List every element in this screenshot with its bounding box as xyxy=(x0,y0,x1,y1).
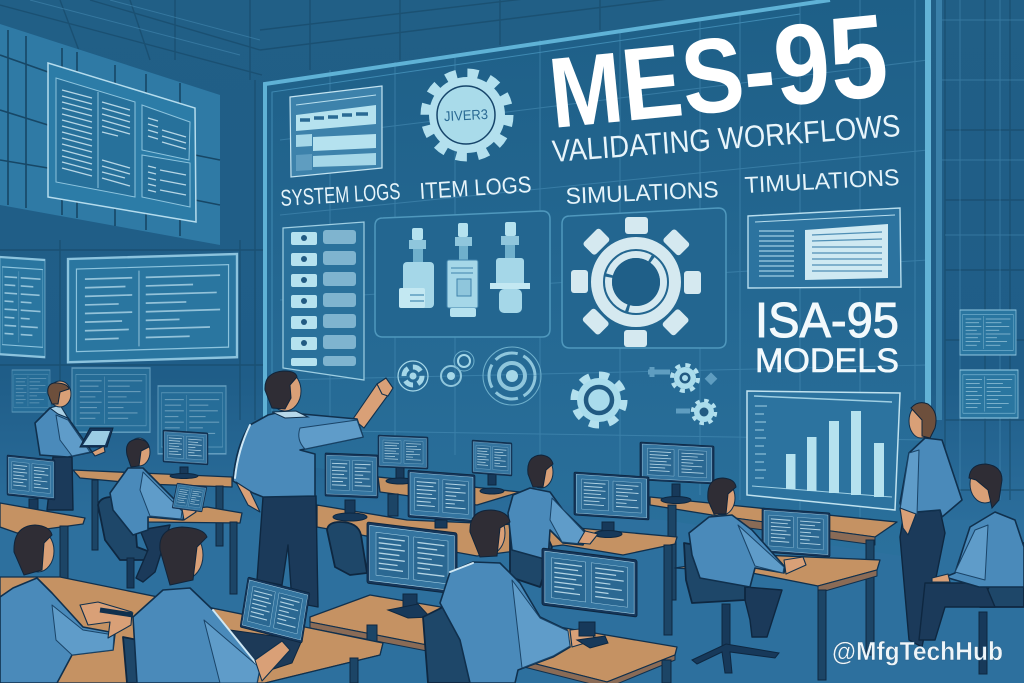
person: seated mid center xyxy=(508,455,598,587)
monitor: right back xyxy=(640,442,714,504)
label: item logs: ITEM LOGS xyxy=(419,171,532,204)
chair: center empty xyxy=(327,522,367,575)
person: standing with tablet xyxy=(35,381,113,510)
monitor: right middle xyxy=(574,472,649,538)
person: seated front left xyxy=(0,525,133,683)
icons: target wheels xyxy=(398,347,541,405)
desk: right middle row xyxy=(675,555,880,680)
bar chart panel xyxy=(747,391,900,510)
person: seated front center right xyxy=(423,510,595,683)
icon: small gears with arrows xyxy=(648,365,717,424)
icon: large lower gear xyxy=(574,375,624,425)
icon: bottle one xyxy=(399,228,434,308)
desk: front center xyxy=(310,595,677,683)
desk: back middle row xyxy=(378,477,520,516)
icon: bottle three xyxy=(490,222,530,313)
wall screens: right side panels xyxy=(960,310,1018,418)
laptop: front xyxy=(230,577,310,675)
heading: ISA-95: ISA-95 xyxy=(755,294,899,348)
monitor: back center pair xyxy=(378,435,512,494)
watermark: handle: @MfgTechHub xyxy=(832,636,1003,666)
icon: gear with label: JIVER3 xyxy=(444,106,489,124)
label: system logs: SYSTEM LOGS xyxy=(280,178,401,211)
monitor: back left xyxy=(163,430,208,478)
icon: bottle two xyxy=(447,223,478,317)
subtitle: validating workflows: VALIDATING WORKFLOWS xyxy=(551,108,902,169)
monitor: left edge xyxy=(7,455,55,518)
panel: left wall display xyxy=(0,24,220,245)
panel: item bottles xyxy=(375,211,550,337)
person: seated at back with laptop xyxy=(98,438,207,588)
person: seated front center left xyxy=(123,527,290,683)
person: seated right center xyxy=(684,478,806,673)
person: seated far right xyxy=(919,464,1024,674)
monitor: large front right xyxy=(542,548,637,648)
heading: models: MODELS xyxy=(755,342,899,380)
label: timulations: TIMULATIONS xyxy=(744,164,900,198)
panel: simulation gear xyxy=(562,208,726,348)
desk: back left row xyxy=(73,470,232,550)
desk: front left xyxy=(0,577,383,683)
desk: left row xyxy=(0,503,85,636)
person: presenter pointing at screen xyxy=(233,371,393,607)
desk: right back row xyxy=(650,497,897,655)
wall screens: left side panels xyxy=(0,254,237,454)
panel: system log window xyxy=(290,86,382,177)
panel: main wall screen xyxy=(265,0,939,560)
panel: log list xyxy=(283,222,364,380)
person: standing right xyxy=(900,403,962,647)
monitor: right front small xyxy=(762,508,830,557)
desk: left second row with laptop xyxy=(148,507,242,594)
monitor: center xyxy=(325,453,378,521)
monitor: large front center xyxy=(367,522,457,618)
monitor: center right xyxy=(408,470,475,528)
label: simulations: SIMULATIONS xyxy=(565,176,719,209)
icon: gear with label xyxy=(425,73,509,157)
desk: center row xyxy=(317,505,677,635)
panel: document window xyxy=(748,208,901,288)
